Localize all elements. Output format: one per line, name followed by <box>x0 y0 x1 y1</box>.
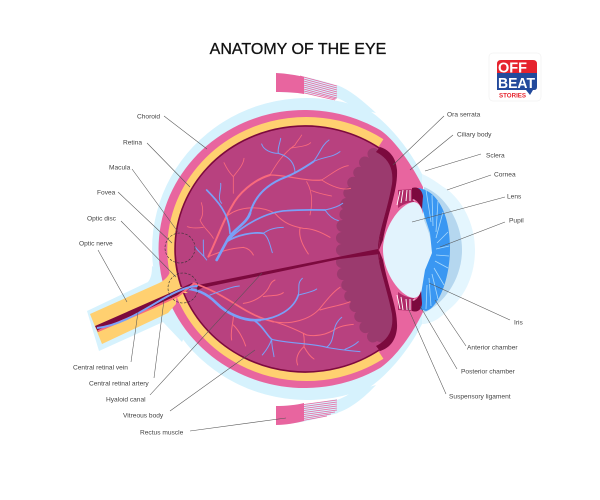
label: Retina <box>123 140 190 187</box>
dashed circle: macula <box>165 233 195 263</box>
rectus muscle bottom <box>276 385 376 425</box>
label: Hyaloid canal <box>106 273 262 404</box>
retinal vessels upper <box>187 135 351 260</box>
label: Lens <box>412 194 522 222</box>
label: Optic disc <box>87 216 176 277</box>
label: Posterior chamber: Posterior chamber <box>461 368 516 376</box>
logo: Off Beat Stories: STORIES <box>499 92 526 100</box>
sclera <box>152 98 422 400</box>
label: Optic disc: Optic disc <box>87 216 117 222</box>
label: Macula: Macula <box>109 164 131 172</box>
logo: Off Beat Stories: BEAT <box>498 76 535 92</box>
choroid dark wedges <box>376 147 397 250</box>
label: Suspensory ligament: Suspensory ligament <box>449 394 511 400</box>
logo: Off Beat Stories <box>489 53 541 101</box>
label: Sclera <box>425 152 505 171</box>
label: Optic nerve <box>79 240 127 302</box>
label: Fovea <box>97 190 172 243</box>
anterior chamber <box>424 187 462 313</box>
label: Central retinal artery <box>89 300 164 388</box>
pink outer layer: choroid <box>159 110 423 388</box>
label: Fovea: Fovea <box>97 190 116 196</box>
wavy ora serrata band <box>336 148 392 342</box>
logo: Off Beat Stories: OFF <box>498 60 527 76</box>
cornea <box>422 174 475 324</box>
ciliary dark tips <box>412 187 423 312</box>
label: Central retinal artery: Central retinal artery <box>89 380 149 388</box>
label: Ora serrata: Ora serrata <box>447 112 481 118</box>
hyaloid canal <box>196 249 380 291</box>
label: Central retinal vein: Central retinal vein <box>73 364 128 372</box>
optic nerve sheath <box>87 266 200 351</box>
label: Suspensory ligament <box>408 308 511 400</box>
label: Vitreous body <box>123 350 255 420</box>
title: ANATOMY OF THE EYE <box>210 41 386 58</box>
label: Optic nerve: Optic nerve <box>79 240 113 248</box>
optic nerve <box>90 272 198 344</box>
label: Retina: Retina <box>123 140 142 146</box>
label: Ciliary body: Ciliary body <box>457 132 492 138</box>
label: Lens: Lens <box>507 194 522 200</box>
iris <box>415 188 450 311</box>
label: Rectus muscle <box>140 418 286 436</box>
label: Posterior chamber <box>420 306 516 376</box>
label: Macula <box>109 164 178 232</box>
label: Choroid <box>137 114 207 149</box>
central vessels <box>95 283 195 332</box>
rectus muscle top <box>276 73 376 113</box>
label: Choroid: Choroid <box>137 114 160 120</box>
retinal vessels lower <box>180 278 360 365</box>
label: Rectus muscle: Rectus muscle <box>140 430 184 436</box>
lens <box>383 202 432 298</box>
label: Central retinal vein <box>73 312 138 372</box>
label: Ora serrata <box>393 112 481 165</box>
label: Cornea: Cornea <box>494 172 516 178</box>
label: Pupil <box>440 218 524 247</box>
label: Anterior chamber: Anterior chamber <box>467 344 518 352</box>
vitreous body <box>175 126 400 372</box>
label: Cornea <box>447 172 516 190</box>
label: Anterior chamber <box>435 300 518 352</box>
label: Iris <box>429 283 523 326</box>
dashed circle: optic disc <box>168 273 198 303</box>
suspensory ligament strands <box>397 189 414 311</box>
label: Iris: Iris <box>514 320 523 326</box>
label: Ciliary body <box>410 132 492 170</box>
label: Pupil: Pupil <box>509 218 524 224</box>
label: Hyaloid canal: Hyaloid canal <box>106 396 146 404</box>
label: Vitreous body: Vitreous body <box>123 412 164 420</box>
retina yellow layer <box>172 122 381 377</box>
label: Sclera: Sclera <box>486 152 505 160</box>
